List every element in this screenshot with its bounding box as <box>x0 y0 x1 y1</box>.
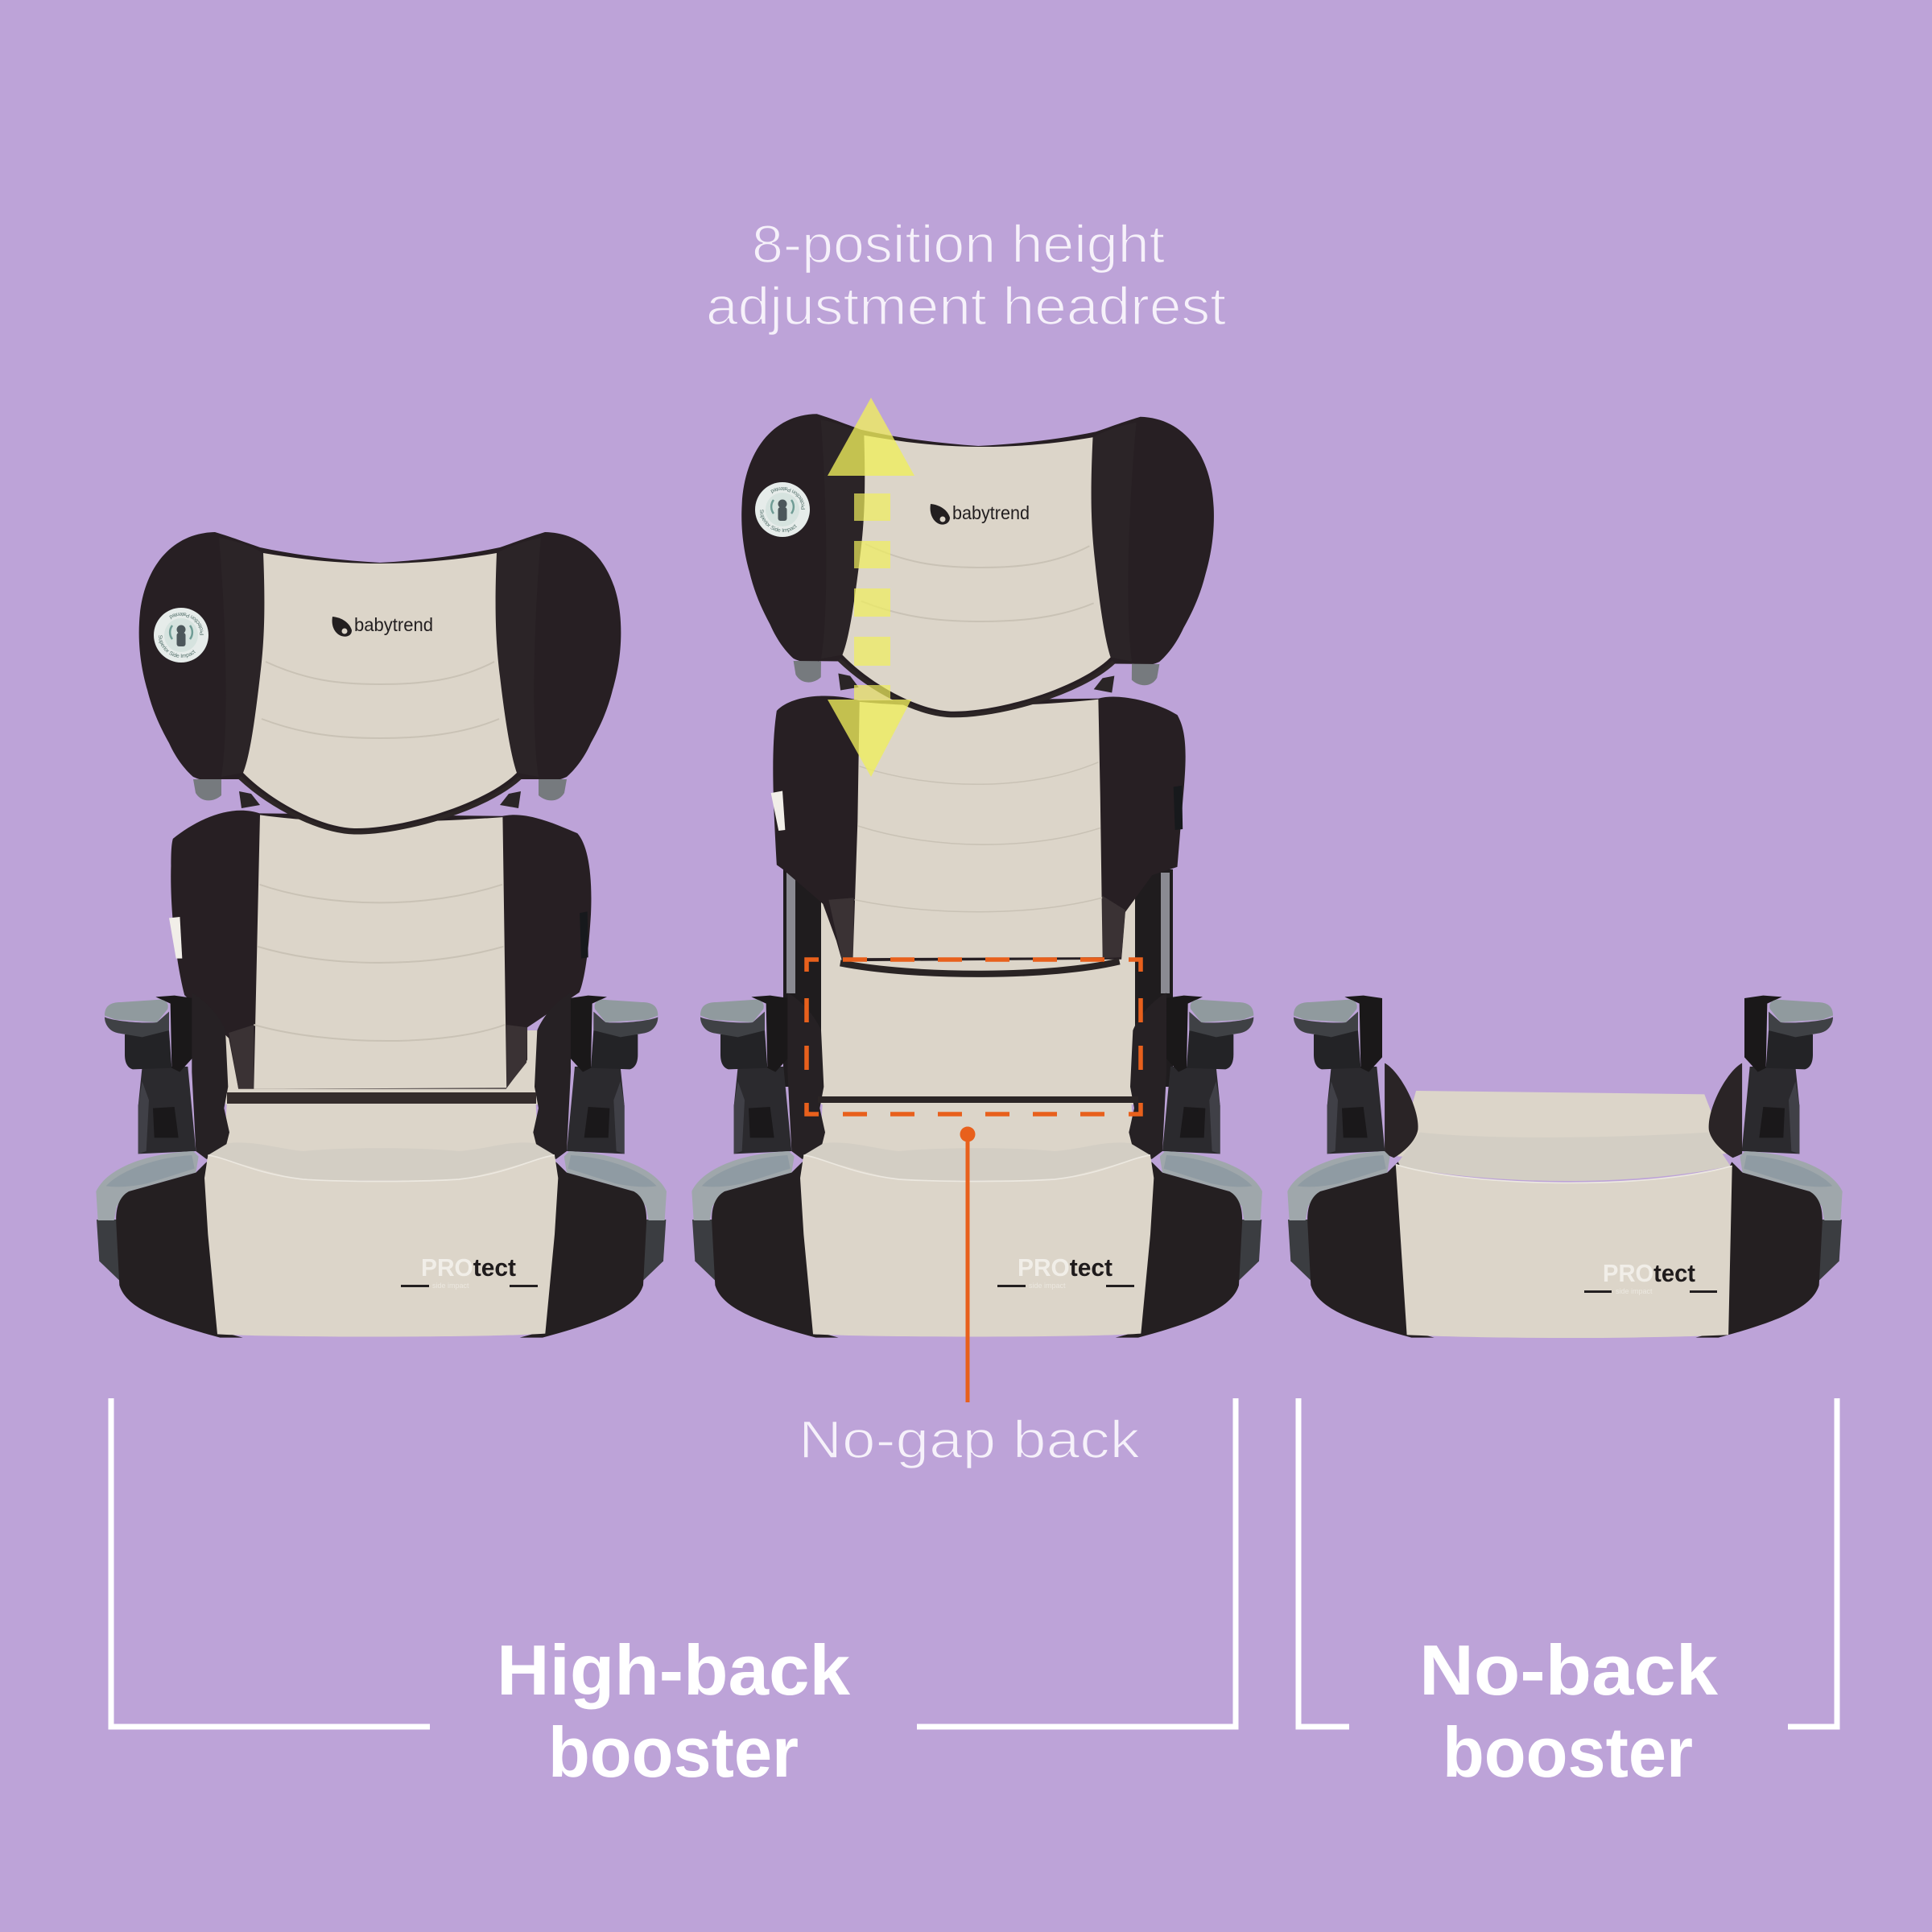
arm towers <box>1294 996 1833 1154</box>
rear seat pan <box>1396 1091 1730 1181</box>
front seat cushion <box>1396 1165 1732 1338</box>
seat base with armrests and cup holders <box>96 993 667 1338</box>
label: high-back booster: booster <box>548 1712 799 1792</box>
safety badge: Protection Patented <box>169 613 204 635</box>
safety badge: Superior Side Impact <box>159 635 196 658</box>
seat back <box>169 811 591 1089</box>
label: no-back booster <box>1419 1630 1719 1792</box>
label: no-back booster: booster <box>1443 1712 1693 1792</box>
bracket: high-back booster <box>111 1398 1236 1727</box>
callout leader: no-gap back <box>960 1127 976 1402</box>
exposed back panel <box>225 1030 538 1104</box>
side wings <box>1385 1063 1742 1158</box>
seat: high-back booster, lowered headrest <box>96 532 667 1338</box>
label: no-back booster: No-back <box>1419 1630 1719 1710</box>
bracket: no-back booster <box>1298 1398 1837 1727</box>
PROtect logo <box>997 1253 1134 1290</box>
PROtect logo: side impact <box>432 1282 469 1290</box>
label: no-gap back: No-gap back <box>799 1410 1141 1469</box>
label: high-back booster <box>497 1630 851 1792</box>
babytrend logo <box>931 502 1030 525</box>
PROtect logo <box>401 1253 538 1290</box>
heading: headrest adjustment <box>706 214 1226 336</box>
PROtect logo: side impact <box>1029 1282 1066 1290</box>
piping between back and base <box>227 1092 536 1104</box>
PROtect logo: PROtect <box>421 1253 516 1282</box>
frame rails and exposed back panel <box>783 869 1173 1104</box>
seat: no-back booster <box>1287 996 1843 1338</box>
babytrend logo: babytrend <box>952 502 1030 523</box>
safety badge: Superior Side Impact <box>760 510 797 533</box>
upper seat back <box>771 696 1186 974</box>
safety badge: Protection Patented <box>770 487 805 510</box>
label: high-back booster: High-back <box>497 1630 851 1710</box>
safety badge <box>154 608 208 663</box>
cup holders and side cushions <box>1287 1151 1843 1338</box>
no-gap highlight: dashed box <box>807 960 1141 1114</box>
safety badge <box>755 482 810 537</box>
piping between back and base <box>818 1096 1138 1103</box>
PROtect logo: PROtect <box>1018 1253 1113 1282</box>
babytrend logo: babytrend <box>354 614 433 635</box>
heading: headrest adjustment: 8-position height <box>752 214 1165 274</box>
heading: headrest adjustment: adjustment headrest <box>706 276 1226 336</box>
PROtect logo <box>1584 1259 1717 1295</box>
headrest <box>139 532 621 832</box>
PROtect logo: PROtect <box>1603 1259 1695 1287</box>
seat base with armrests and cup holders <box>691 993 1262 1338</box>
seat: high-back booster, raised headrest <box>691 414 1262 1338</box>
PROtect logo: side impact <box>1616 1287 1653 1295</box>
arrow: headrest height adjustment <box>828 398 914 777</box>
headrest <box>740 413 1215 718</box>
